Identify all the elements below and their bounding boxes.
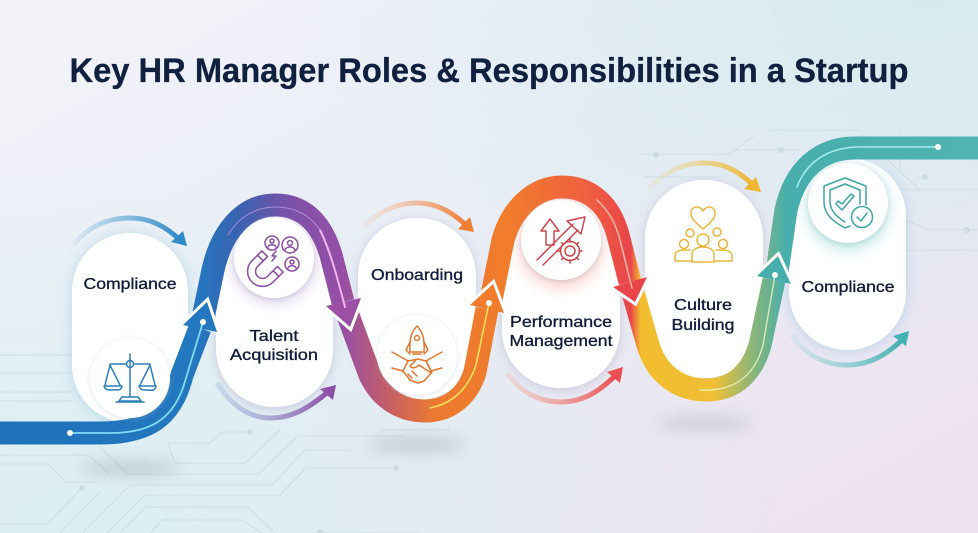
icon: heart and team <box>675 207 732 262</box>
label: talent acquisition <box>230 328 318 364</box>
icon: rocket and handshake <box>377 315 457 395</box>
arc arrow: culture <box>648 163 761 192</box>
ribbon segment: yellow with teal head <box>632 256 791 390</box>
title: Key HR Manager Roles & Responsibilities in a Startup <box>70 52 908 90</box>
arc arrow: onboarding <box>363 203 474 232</box>
ribbon highlights <box>70 147 938 433</box>
label: talent acquisition: Talent <box>250 328 299 345</box>
label: compliance end: Compliance <box>802 279 895 296</box>
label: performance management: Performance <box>510 314 612 331</box>
arc arrow: compliance end <box>792 331 909 365</box>
ribbon segment: blue-purple with purple head <box>203 205 361 327</box>
card: culture building <box>645 180 763 378</box>
label: culture building: Culture <box>674 297 732 314</box>
small arc arrows <box>73 163 909 418</box>
label: performance management: Management <box>510 333 613 350</box>
card: onboarding <box>358 218 476 400</box>
ground shadows <box>80 419 753 473</box>
card: performance management <box>502 195 620 388</box>
icon: shield and check <box>808 163 888 243</box>
card: compliance end <box>789 158 906 350</box>
card: talent acquisition <box>216 215 333 407</box>
ribbon segment: purple-orange with orange head <box>346 284 504 411</box>
label: compliance: Compliance <box>84 276 177 293</box>
card: compliance <box>72 233 188 423</box>
ribbon segment: blue with blue head <box>0 302 217 433</box>
ribbon path <box>0 144 978 436</box>
label: onboarding: Onboarding <box>371 267 463 284</box>
icon: scales <box>90 338 170 418</box>
icon: magnet and people <box>234 218 314 298</box>
label: culture building: Building <box>672 317 734 334</box>
ribbon segment: orange-red with red head <box>491 187 647 302</box>
label: performance management <box>510 314 613 350</box>
label: culture building <box>672 297 734 334</box>
icon halo tints <box>217 150 905 318</box>
icon: growth arrows and gear <box>521 200 601 280</box>
arc arrow: compliance <box>73 218 187 246</box>
arc arrow: performance <box>507 367 623 402</box>
label: talent acquisition: Acquisition <box>230 347 318 364</box>
arc arrow: talent acquisition <box>217 383 336 418</box>
ribbon segment: teal top <box>777 148 978 272</box>
